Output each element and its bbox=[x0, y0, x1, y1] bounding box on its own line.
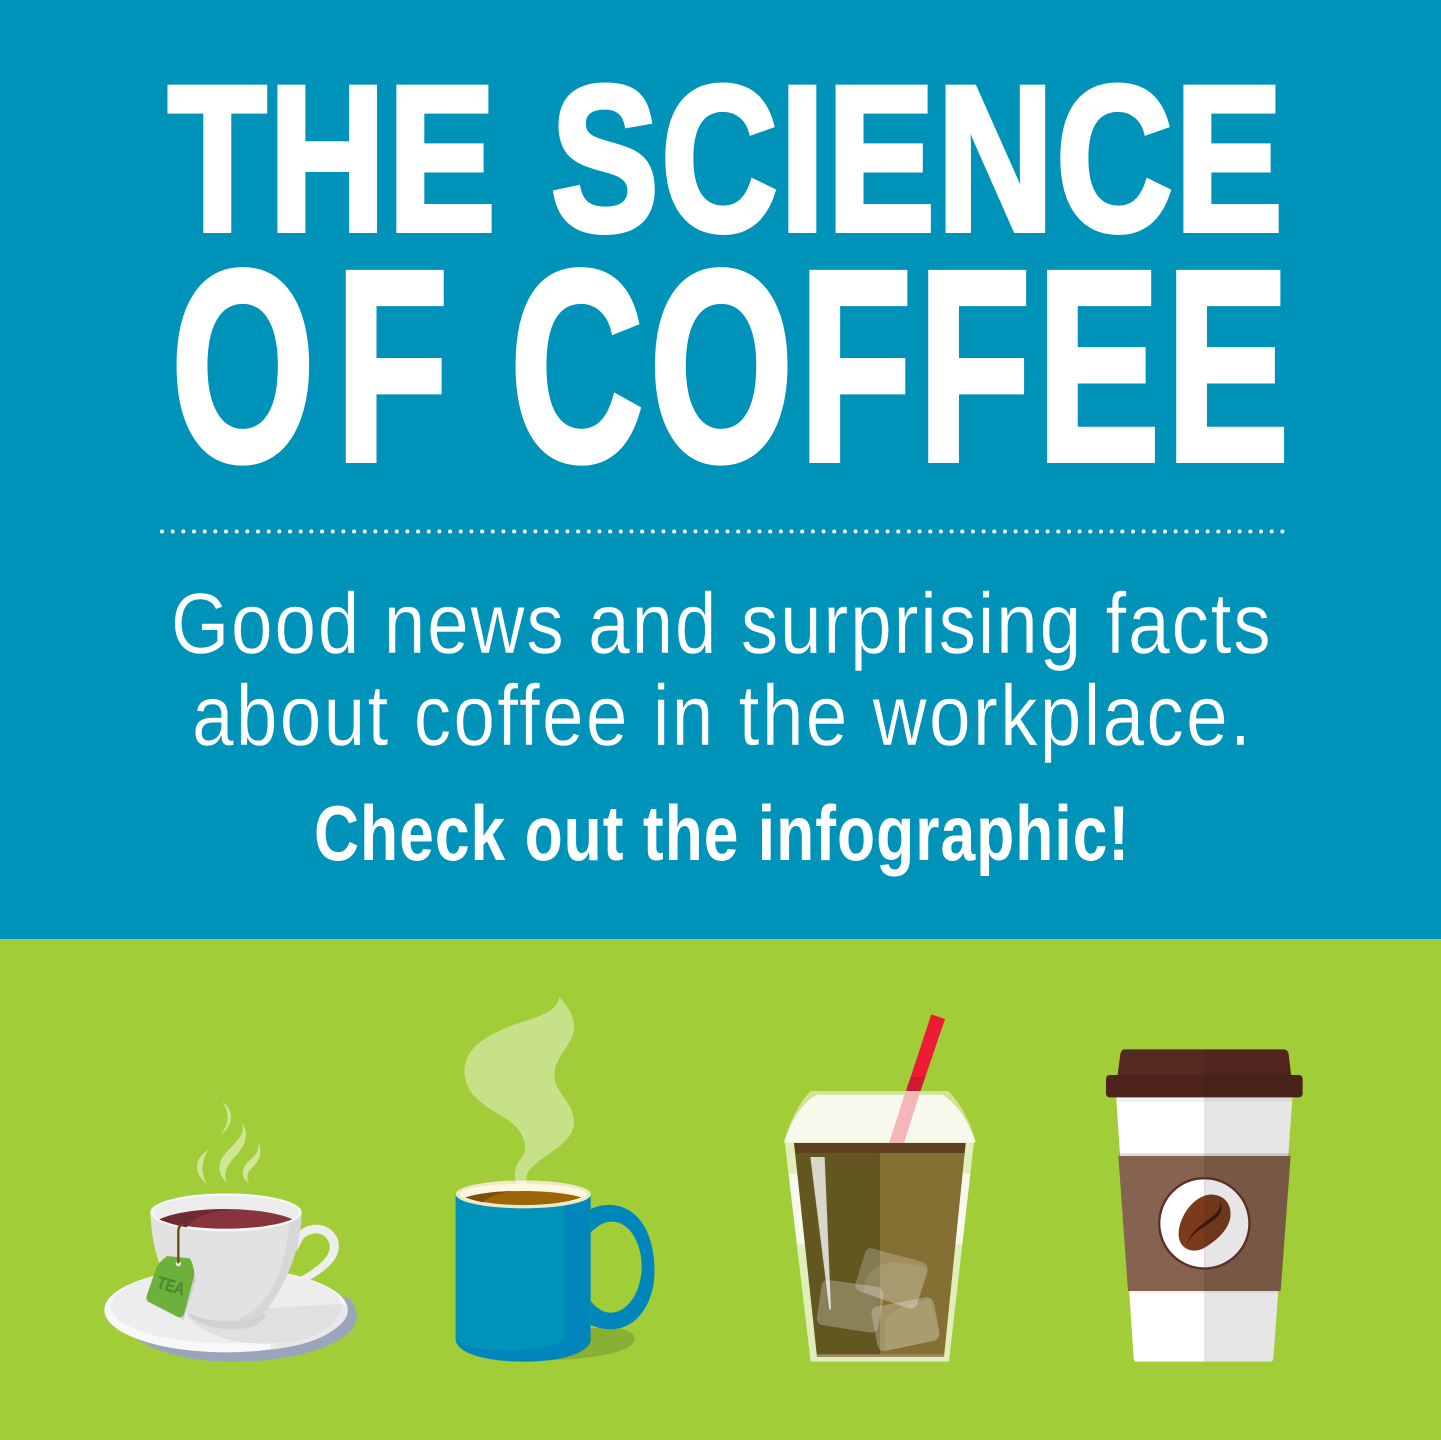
tea steam bbox=[197, 1102, 260, 1184]
mug steam bbox=[464, 997, 574, 1187]
glass lid highlight bbox=[784, 1095, 976, 1142]
cup lower left bbox=[1116, 1095, 1204, 1362]
title line 1 bbox=[168, 44, 1283, 275]
tea surface shadow bbox=[159, 1209, 230, 1227]
mug interior bbox=[460, 1184, 587, 1205]
mug body bbox=[456, 1194, 591, 1362]
dotted divider bbox=[162, 530, 1284, 534]
straw through lid bbox=[889, 1092, 920, 1143]
sleeve shadow on cup bbox=[1119, 1153, 1289, 1157]
title line 2: COFFEE bbox=[510, 214, 1289, 518]
title line 1: THE bbox=[168, 44, 496, 275]
cup body bbox=[150, 1212, 302, 1321]
lid band left bbox=[1106, 1075, 1204, 1097]
straw upper bbox=[911, 1014, 945, 1077]
call to action: Check out the infographic! bbox=[314, 789, 1129, 877]
straw overlap bbox=[905, 1077, 925, 1092]
badge ring bbox=[1158, 1177, 1251, 1270]
title line 1: SCIENCE bbox=[551, 44, 1283, 275]
icon: blue coffee mug bbox=[456, 997, 655, 1362]
bean shade bbox=[1204, 1195, 1230, 1248]
glass reflection bbox=[810, 1157, 831, 1310]
cup foot shadow bbox=[186, 1313, 266, 1329]
tea tag shadow bbox=[147, 1262, 196, 1320]
saucer shade bbox=[187, 1304, 341, 1344]
glass outer bbox=[785, 1142, 974, 1362]
cup handle bbox=[280, 1225, 339, 1296]
sleeve left bbox=[1118, 1156, 1204, 1291]
lid top right bbox=[1204, 1049, 1291, 1077]
ice cube back inner bbox=[863, 1262, 927, 1308]
title line 2 bbox=[171, 214, 1289, 518]
mug front highlight bbox=[456, 1198, 565, 1350]
coffee left bbox=[794, 1143, 880, 1357]
tag string bbox=[178, 1225, 184, 1263]
title line 2: OF bbox=[171, 214, 448, 518]
saucer inner bbox=[110, 1269, 342, 1343]
saucer bbox=[104, 1268, 348, 1352]
lid shadow on cup bbox=[1116, 1097, 1293, 1102]
coffee bean bbox=[1179, 1195, 1230, 1251]
sleeve right bbox=[1204, 1156, 1291, 1291]
cup interior bbox=[153, 1196, 299, 1229]
subtitle line 1: Good news and surprising facts bbox=[171, 576, 1271, 672]
tag label: TEA bbox=[155, 1272, 188, 1299]
cup rim bbox=[150, 1193, 302, 1231]
coffee surface shadow bbox=[465, 1191, 513, 1202]
coffee top shade bbox=[794, 1143, 966, 1153]
badge right bbox=[1204, 1179, 1248, 1267]
glass lid bbox=[784, 1091, 976, 1142]
coffee right bbox=[880, 1143, 966, 1357]
bean groove bbox=[1187, 1201, 1221, 1246]
mug rim bbox=[456, 1180, 591, 1208]
panel: blue header background bbox=[0, 0, 1441, 939]
lid top left bbox=[1117, 1049, 1204, 1077]
mug handle bbox=[591, 1205, 655, 1329]
icon: cup of tea bbox=[104, 1102, 357, 1362]
saucer shadow bbox=[123, 1297, 357, 1362]
badge left bbox=[1160, 1179, 1204, 1267]
ice cube left bbox=[817, 1280, 884, 1333]
ice cube right inner bbox=[885, 1298, 939, 1351]
mug ground shadow bbox=[540, 1327, 635, 1360]
tea tag bbox=[146, 1256, 194, 1317]
coffee bottom line bbox=[817, 1354, 944, 1357]
tea surface bbox=[159, 1209, 292, 1229]
icon: takeaway coffee cup bbox=[1106, 1049, 1303, 1362]
coffee surface bbox=[465, 1191, 581, 1205]
tag hole bbox=[176, 1261, 181, 1266]
cup body shade bbox=[237, 1215, 302, 1320]
glass highlight band bbox=[789, 1174, 970, 1244]
sleeve shadow lower bbox=[1129, 1291, 1279, 1293]
icon: iced coffee bbox=[784, 1014, 976, 1362]
panel: green illustration background bbox=[0, 939, 1441, 1440]
subtitle line 2: about coffee in the workplace. bbox=[192, 668, 1251, 764]
ice cube back bbox=[855, 1248, 928, 1308]
ice cube right bbox=[872, 1297, 939, 1351]
saucer lower right rim bbox=[270, 1304, 348, 1349]
lid band right bbox=[1204, 1075, 1303, 1097]
cup lower right bbox=[1204, 1095, 1293, 1362]
